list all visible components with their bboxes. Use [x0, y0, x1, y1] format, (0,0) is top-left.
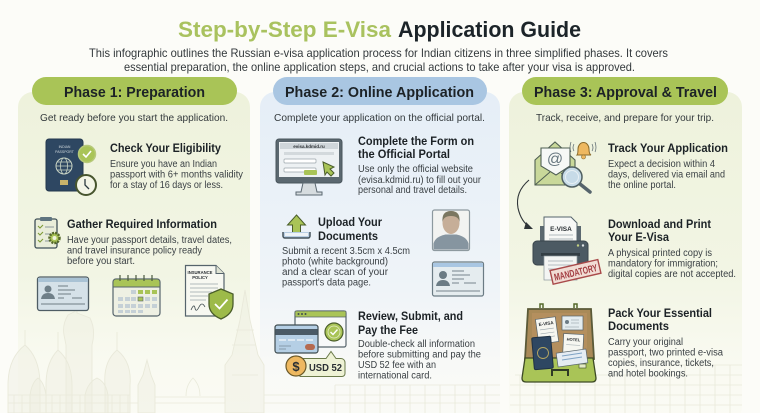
- title: second part: Application Guide: [398, 17, 581, 42]
- step: gather required information: Gather Required Information: [67, 217, 217, 231]
- step: complete the form: Complete the Form on: [358, 134, 474, 148]
- step: complete the form: (evisa.kdmid.ru) to fill out your: [358, 175, 482, 186]
- step: gather required information: [67, 217, 232, 267]
- step: pack your essential documents: copies, insurance, tickets,: [608, 358, 714, 369]
- step: download and print: digital copies are not accepted.: [608, 269, 736, 280]
- step: review, submit, pay: Pay the Fee: [358, 323, 418, 337]
- step: upload your documents: Submit a recent 3.5cm x 4.5cm: [282, 246, 410, 257]
- step: track your application: Expect a decision within 4: [608, 159, 716, 170]
- step: download and print: A physical printed copy is: [608, 248, 712, 259]
- step: track your application: Track Your Application: [608, 141, 728, 155]
- step: complete the form: Use only the official website: [358, 164, 474, 175]
- step: check your eligibility: Ensure you have an Indian: [110, 159, 217, 170]
- step: track your application: days, delivered via email and: [608, 170, 725, 180]
- step: pack your essential documents: Pack Your Essential: [608, 306, 712, 320]
- phase 1 header pill: Phase 1: Preparation: [64, 84, 205, 101]
- arrow: track to print: [517, 180, 533, 229]
- panel: phase 3 background: [509, 92, 742, 413]
- icon: open suitcase with documents: [522, 304, 596, 382]
- step: check your eligibility: Check Your Eligibility: [110, 141, 221, 155]
- icon: insurance policy with shield: INSURANCE: [188, 270, 213, 275]
- phase 2 header pill: [273, 77, 487, 105]
- step: complete the form: the Official Portal: [358, 147, 450, 161]
- panel: phase 2 background: [260, 92, 500, 413]
- icon: envelope, bell, magnifier: [535, 142, 596, 192]
- phase 1 header pill: [32, 77, 237, 105]
- icon: passport with check and clock: INDIAN: [59, 145, 71, 149]
- step: review, submit, pay: international card.: [358, 370, 432, 382]
- icon: portrait photo: [432, 210, 470, 250]
- step: complete the form: personal and travel details.: [358, 185, 467, 196]
- phase 2 header pill: Phase 2: Online Application: [285, 84, 474, 101]
- phase 3 header pill: [522, 77, 728, 105]
- intro text: [89, 46, 668, 74]
- step: upload your documents: Documents: [318, 229, 378, 243]
- phase 1 intro: Get ready before you start the application.: [40, 113, 228, 124]
- step: pack your essential documents: passport, two printed e-visa: [608, 348, 724, 358]
- step: download and print: Download and Print: [608, 217, 711, 231]
- step: review, submit, pay: USD 52 fee with an: [358, 360, 436, 371]
- icon: open suitcase with documents: E-VISA: [538, 320, 555, 327]
- step: review, submit, pay: Double-check all information: [358, 339, 475, 350]
- step: check your eligibility: passport with 6+ months validity: [110, 170, 243, 180]
- step: check your eligibility: [110, 141, 243, 191]
- step: download and print: mandatory for immigration;: [608, 258, 718, 270]
- step: review, submit, pay: before submitting and pay the: [358, 350, 482, 360]
- icon: payment card, window, fee badge: $: [292, 359, 300, 374]
- icon: passport with check and clock: [46, 139, 96, 195]
- icon: passport scan: [432, 262, 484, 296]
- step: gather required information: and travel insurance policy ready: [67, 246, 202, 256]
- step: upload your documents: Upload Your: [318, 215, 382, 229]
- skyline: St Basil's and Kremlin backdrop: [8, 290, 742, 413]
- step: track your application: the online portal.: [608, 180, 676, 191]
- icon: printer with mandatory stamp: MANDATORY: [553, 263, 599, 284]
- icon: passport with check and clock: PASSPORT: [55, 150, 75, 154]
- phase 3 intro: Track, receive, and prepare for your trip.: [536, 113, 714, 124]
- icon: monitor with portal: [276, 139, 342, 195]
- step: review, submit, pay: [358, 309, 482, 382]
- intro text: essential preparation, the online application steps, and crucial actions to take after your visa is approved.: [124, 60, 635, 74]
- icon: insurance policy with shield: [186, 266, 233, 319]
- step: gather required information: before you start.: [67, 256, 135, 267]
- icon: upload arrow and tray: [283, 215, 310, 238]
- step: pack your essential documents: Carry your original: [608, 337, 683, 348]
- step: gather required information: Have your passport details, travel dates,: [67, 235, 232, 246]
- icon: printer with mandatory stamp: [533, 217, 601, 284]
- step: track your application: [608, 141, 728, 191]
- phase 2 intro: Complete your application on the official portal.: [274, 113, 485, 124]
- icon: clipboard and gear: [35, 217, 60, 248]
- step: check your eligibility: for a stay of 16 days or less.: [110, 180, 223, 191]
- step: pack your essential documents: and hotel bookings.: [608, 368, 688, 380]
- icon: monitor with portal: evisa.kdmid.ru: [293, 144, 325, 149]
- step: review, submit, pay: Review, Submit, and: [358, 309, 463, 323]
- step: pack your essential documents: [608, 306, 724, 380]
- step: download and print: Your E-Visa: [608, 230, 669, 244]
- title: Step-by-Step E-Visa: [178, 17, 391, 42]
- icon: printer with mandatory stamp: E-VISA: [550, 226, 572, 233]
- icon: payment card, window, fee badge: USD 52: [309, 363, 342, 374]
- intro text: This infographic outlines the Russian e-visa application process for Indian citizens in three simplified phases. It covers: [89, 46, 668, 60]
- step: upload your documents: photo (white background): [282, 256, 388, 268]
- phase 3 header pill: Phase 3: Approval & Travel: [534, 84, 717, 101]
- step: pack your essential documents: Documents: [608, 319, 669, 333]
- icon: payment card, window, fee badge: [275, 311, 346, 376]
- icon: insurance policy with shield: POLICY: [192, 275, 208, 280]
- step: complete the form: [358, 134, 482, 196]
- icon: envelope, bell, magnifier: @: [547, 151, 563, 168]
- icon: passport data page: [38, 277, 88, 310]
- step: download and print: [608, 217, 736, 280]
- panel: phase 1 background: [18, 92, 250, 413]
- icon: calendar: [113, 275, 160, 316]
- step: upload your documents: passport's data page.: [282, 278, 371, 288]
- step: upload your documents: [282, 215, 410, 288]
- icon: open suitcase with documents: HOTEL: [567, 337, 581, 342]
- step: upload your documents: and a clear scan of your: [282, 267, 389, 278]
